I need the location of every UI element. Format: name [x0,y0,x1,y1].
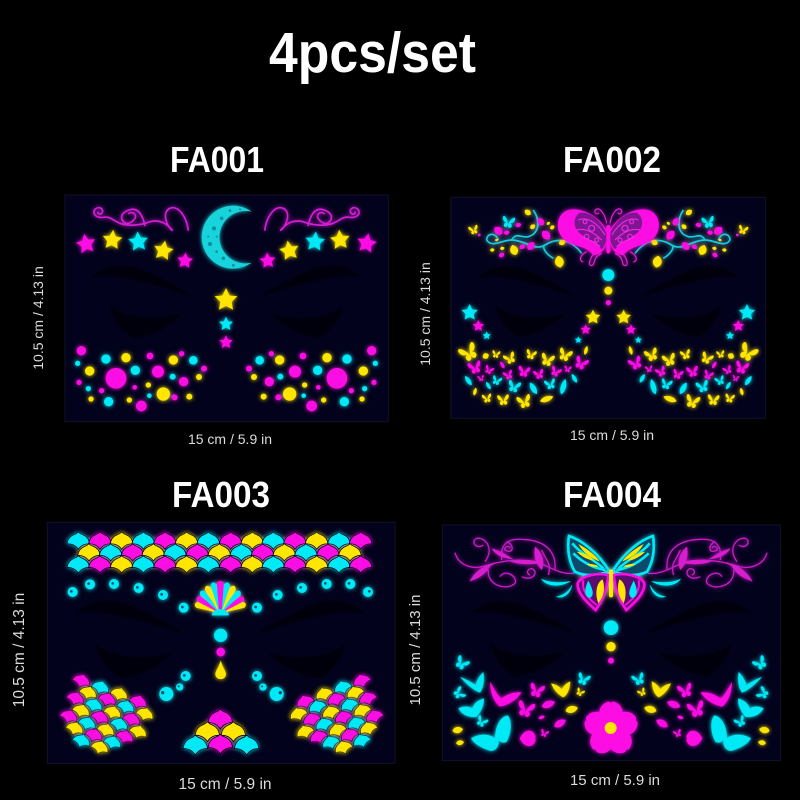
closed eyes [92,266,361,338]
flourishes [94,208,359,231]
stars [75,229,378,348]
label: FA003 height: 10.5 cm / 4.13 in [11,593,28,707]
closed eyes [76,601,364,678]
crescent moon [202,206,252,269]
panel: FA003 [47,522,395,763]
cheek stars and butterflies [457,304,759,409]
flower [582,702,640,758]
centre dots [604,620,618,664]
label: FA003 width: 15 cm / 5.9 in [178,776,272,793]
title: 4pcs/set [269,21,476,85]
cheek dots [75,346,378,411]
cheek scales [58,671,385,757]
vine decoration [468,208,749,268]
label: FA001 height: 10.5 cm / 4.13 in [30,266,46,370]
closed eyes [471,601,751,677]
magenta butterfly [558,209,659,266]
label: FA001 width: 15 cm / 5.9 in [188,431,272,447]
heading: FA004: FA004 [563,474,661,515]
seashell [194,581,247,615]
neon butterfly [568,536,654,610]
panel background [65,195,388,422]
heading: FA003: FA003 [172,474,270,515]
label: FA002 height: 10.5 cm / 4.13 in [417,262,433,366]
flourishes and swooshes [455,538,767,598]
cheek butterflies [452,655,770,751]
label: FA004 width: 15 cm / 5.9 in [570,772,660,789]
closed eyes [478,267,739,337]
label: FA004 height: 10.5 cm / 4.13 in [407,595,424,705]
scale band [67,532,372,573]
panel background [442,525,780,761]
panel background [47,522,395,763]
heading: FA001: FA001 [170,139,264,180]
panel: FA002 [451,197,766,418]
heading: FA002: FA002 [563,139,661,180]
panel: FA004 [442,525,780,761]
centre dots [602,269,614,305]
centre drops [214,629,227,679]
panel background [451,197,766,418]
label: FA002 width: 15 cm / 5.9 in [570,427,654,443]
panel: FA001 [65,195,388,422]
bubbles [68,579,373,701]
chin scales [183,709,259,755]
